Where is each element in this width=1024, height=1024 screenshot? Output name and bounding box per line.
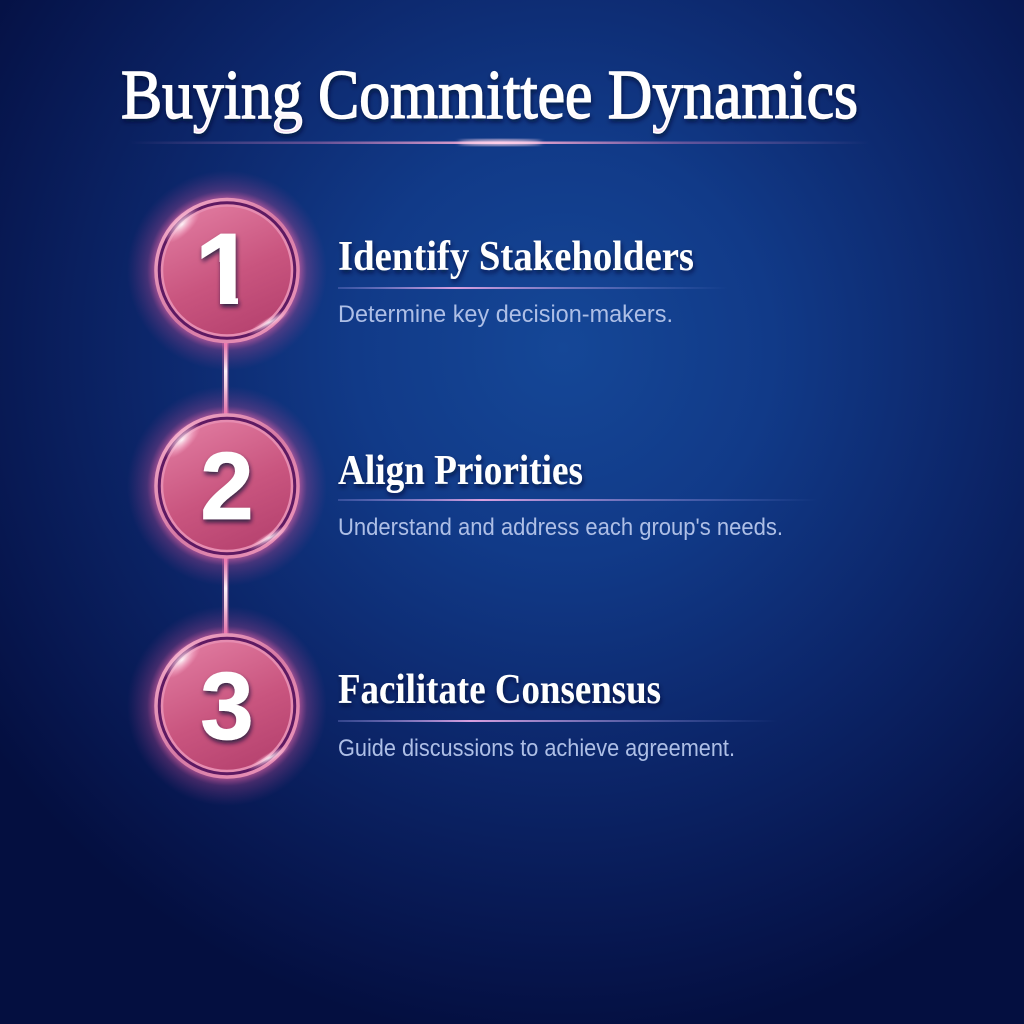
step 1 description: Determine key decision-makers.: [338, 301, 673, 328]
step 3 badge: [127, 606, 327, 806]
number 3: 3: [200, 653, 254, 760]
step 1 text: [338, 234, 728, 328]
step 2 rule: [338, 499, 818, 501]
step 3 text: [338, 667, 778, 762]
title: Buying Committee Dynamics: [121, 57, 858, 134]
number 2: 2: [200, 433, 254, 540]
step 3 heading: Facilitate Consensus: [338, 667, 661, 713]
number 1: 1: [194, 211, 256, 334]
step 3 rule: [338, 720, 778, 722]
step 2 heading: Align Priorities: [338, 448, 583, 494]
step 2 description: Understand and address each group's needs.: [338, 514, 783, 541]
connector 1 to 2: [222, 340, 229, 418]
step 2 badge: [127, 386, 327, 586]
title underline: [130, 140, 870, 146]
step 2 text: [338, 448, 818, 541]
step 3 description: Guide discussions to achieve agreement.: [338, 735, 735, 762]
connector 2 to 3: [222, 556, 229, 638]
step 1 rule: [338, 287, 728, 289]
step 1 heading: Identify Stakeholders: [338, 234, 694, 280]
step 1 badge: [127, 170, 327, 370]
